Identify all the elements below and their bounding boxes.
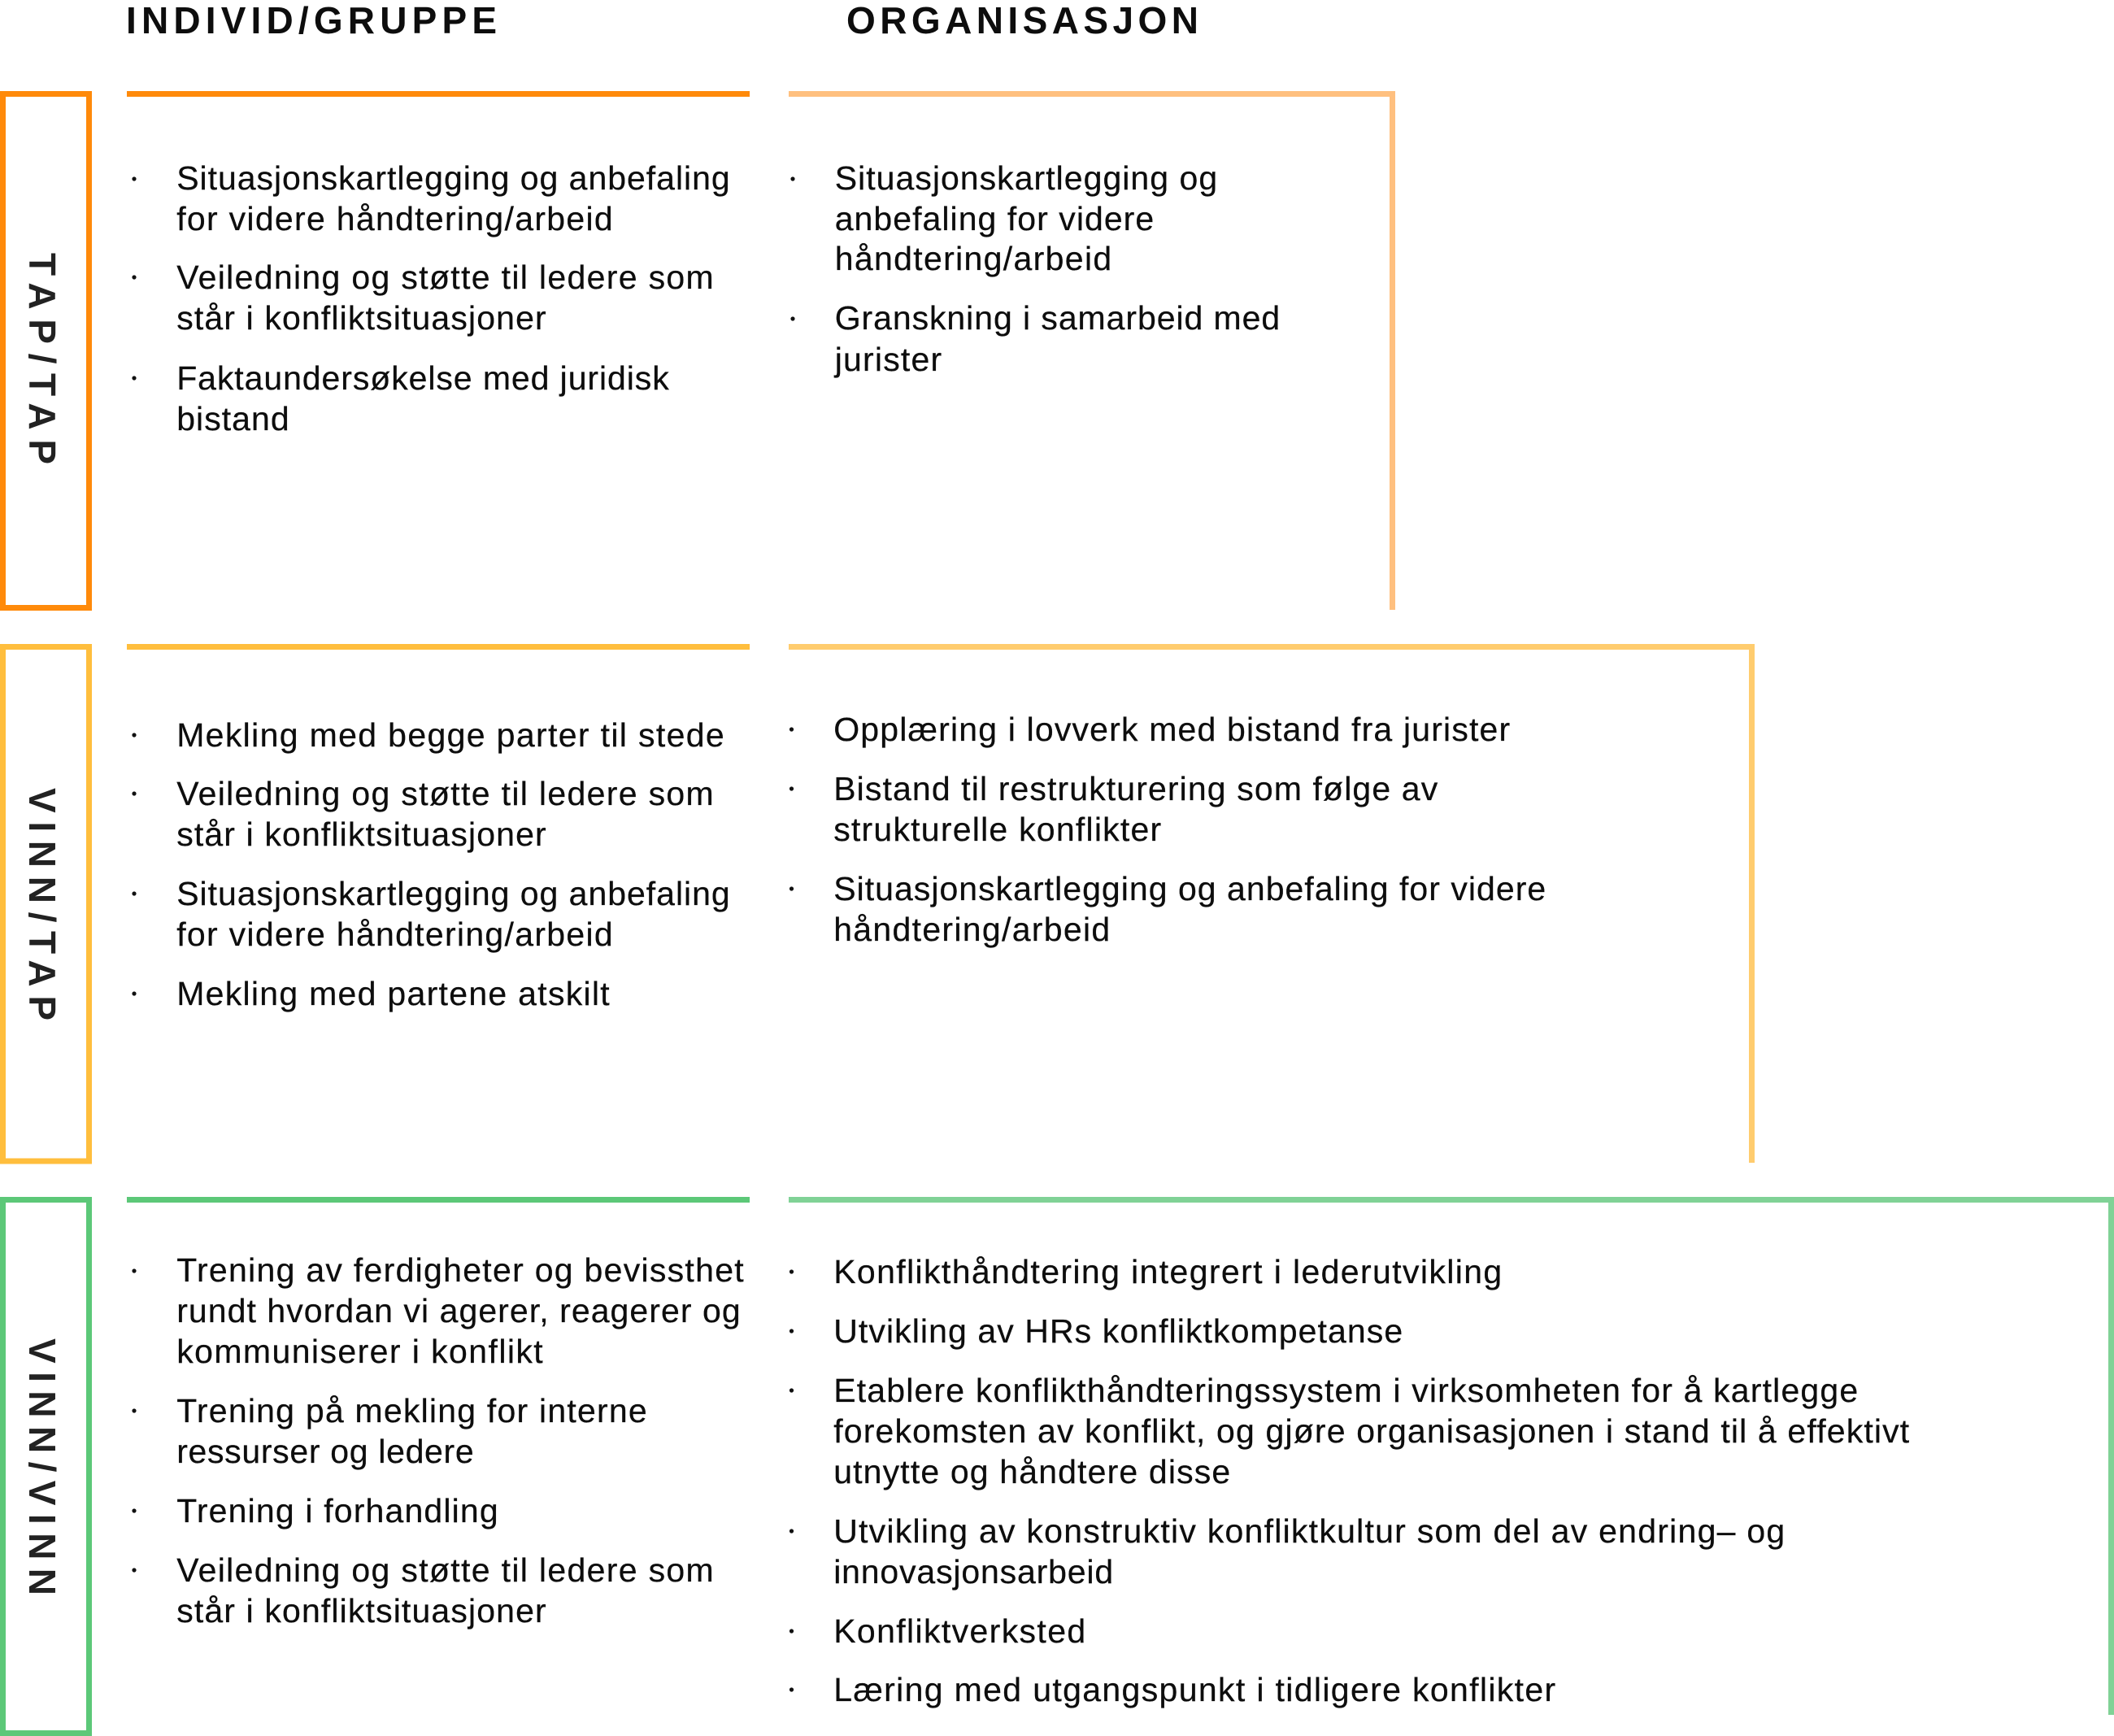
item: forekomsten av konflikt, og gjøre organisasjonen i stand til å effektivt [833, 1412, 1910, 1450]
item [789, 1512, 1785, 1590]
item: utnytte og håndtere disse [833, 1453, 1230, 1490]
item: Veiledning og støtte til ledere som [176, 1551, 714, 1589]
list: tap/tap organisasjon [790, 159, 1280, 378]
bracket: tap/tap organisasjon [789, 94, 1392, 610]
item [790, 159, 1217, 277]
item [789, 770, 1438, 848]
row label box: tap/tap [3, 94, 89, 608]
item: Situasjonskartlegging og anbefaling [176, 159, 730, 197]
bracket: vinn/vinn organisasjon [789, 1200, 2111, 1715]
list: vinn/tap individ [132, 716, 730, 1012]
item: Situasjonskartlegging og [835, 159, 1217, 197]
item: anbefaling for videre [835, 200, 1154, 237]
list: vinn/vinn individ [132, 1251, 744, 1629]
item: Situasjonskartlegging og anbefaling for videre [833, 870, 1546, 907]
item [789, 870, 1546, 948]
item: Veiledning og støtte til ledere som [176, 775, 714, 812]
item: Konfliktverksted [833, 1612, 1085, 1650]
item [790, 299, 1280, 378]
item: håndtering/arbeid [833, 911, 1110, 948]
item: Granskning i samarbeid med [835, 299, 1280, 337]
item [132, 1251, 744, 1370]
item [132, 1551, 714, 1629]
item: Mekling med begge parter til stede [176, 716, 724, 754]
row label box: tap/tap: TAP/TAP [21, 253, 63, 464]
item: står i konfliktsituasjoner [176, 816, 546, 853]
item: for videre håndtering/arbeid [176, 200, 613, 237]
rule: vinn/vinn individ [127, 1197, 750, 1203]
item: kommuniserer i konflikt [176, 1333, 543, 1370]
row label box: vinn/vinn [3, 1200, 89, 1734]
column heading: individ/gruppe: INDIVID/GRUPPE [126, 0, 497, 41]
item [789, 1372, 1910, 1490]
bracket: vinn/tap organisasjon [789, 647, 1751, 1163]
item [132, 1392, 647, 1470]
item: for videre håndtering/arbeid [176, 916, 613, 953]
item: håndtering/arbeid [835, 240, 1111, 277]
row label box: vinn/tap [3, 647, 89, 1161]
item: Konflikthåndtering integrert i lederutvikling [833, 1253, 1502, 1290]
item [132, 775, 714, 853]
list: vinn/vinn organisasjon [789, 1253, 1910, 1708]
item: Trening i forhandling [176, 1492, 498, 1529]
list: tap/tap individ [132, 159, 730, 437]
item: ressurser og ledere [176, 1433, 474, 1470]
row label box: vinn/tap: VINN/TAP [21, 788, 63, 1020]
item: rundt hvordan vi agerer, reagerer og [176, 1292, 741, 1329]
item [132, 875, 730, 953]
item [132, 359, 669, 437]
item: innovasjonsarbeid [833, 1553, 1113, 1590]
item [132, 259, 714, 337]
item: Utvikling av HRs konfliktkompetanse [833, 1312, 1403, 1350]
item: Opplæring i lovverk med bistand fra jurister [833, 711, 1510, 748]
item: Situasjonskartlegging og anbefaling [176, 875, 730, 912]
item: står i konfliktsituasjoner [176, 299, 546, 337]
item: Faktaundersøkelse med juridisk [176, 359, 669, 397]
item: jurister [834, 341, 942, 378]
item: Utvikling av konstruktiv konfliktkultur som del av endring– og [833, 1512, 1785, 1550]
item: Trening på mekling for interne [176, 1392, 647, 1429]
row label box: vinn/vinn: VINN/VINN [21, 1338, 63, 1595]
rule: vinn/tap individ [127, 644, 750, 650]
rule: tap/tap individ [127, 91, 750, 97]
item: Læring med utgangspunkt i tidligere konflikter [833, 1671, 1555, 1708]
item: Mekling med partene atskilt [176, 975, 610, 1012]
list: vinn/tap organisasjon [789, 711, 1546, 948]
item [132, 159, 730, 237]
item: Bistand til restrukturering som følge av [833, 770, 1438, 807]
item: strukturelle konflikter [833, 811, 1161, 848]
item: Trening av ferdigheter og bevissthet [176, 1251, 744, 1289]
item: Veiledning og støtte til ledere som [176, 259, 714, 296]
item: bistand [176, 400, 289, 437]
item: står i konfliktsituasjoner [176, 1592, 546, 1629]
column heading: organisasjon: ORGANISASJON [846, 0, 1198, 41]
item: Etablere konflikthåndteringssystem i virksomheten for å kartlegge [833, 1372, 1858, 1409]
